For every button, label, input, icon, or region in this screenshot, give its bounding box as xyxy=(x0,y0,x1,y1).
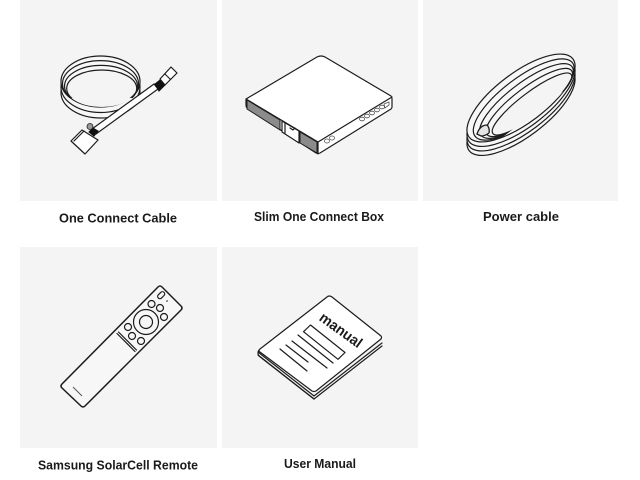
label: power cable: Power cable xyxy=(483,210,559,224)
icon: power plug xyxy=(477,125,489,136)
label: one connect cable: One Connect Cable xyxy=(59,212,177,226)
label: samsung solarcell remote: Samsung SolarCell Remote xyxy=(38,458,198,472)
manual cover title: manual xyxy=(316,310,365,352)
icon: power cable xyxy=(466,54,576,156)
panel: samsung solarcell remote xyxy=(20,247,217,448)
icon: one connect cable xyxy=(61,56,177,154)
panel: slim one connect box xyxy=(222,0,418,201)
panel: user manual xyxy=(222,247,418,448)
label: slim one connect box: Slim One Connect Box xyxy=(254,210,384,224)
icon: slim one connect box xyxy=(246,56,392,154)
label: user manual: User Manual xyxy=(284,457,356,471)
icon: manual xyxy=(258,296,382,399)
panel: one connect cable xyxy=(20,0,217,201)
icon: remote xyxy=(61,286,182,407)
panel: power cable xyxy=(423,0,618,201)
